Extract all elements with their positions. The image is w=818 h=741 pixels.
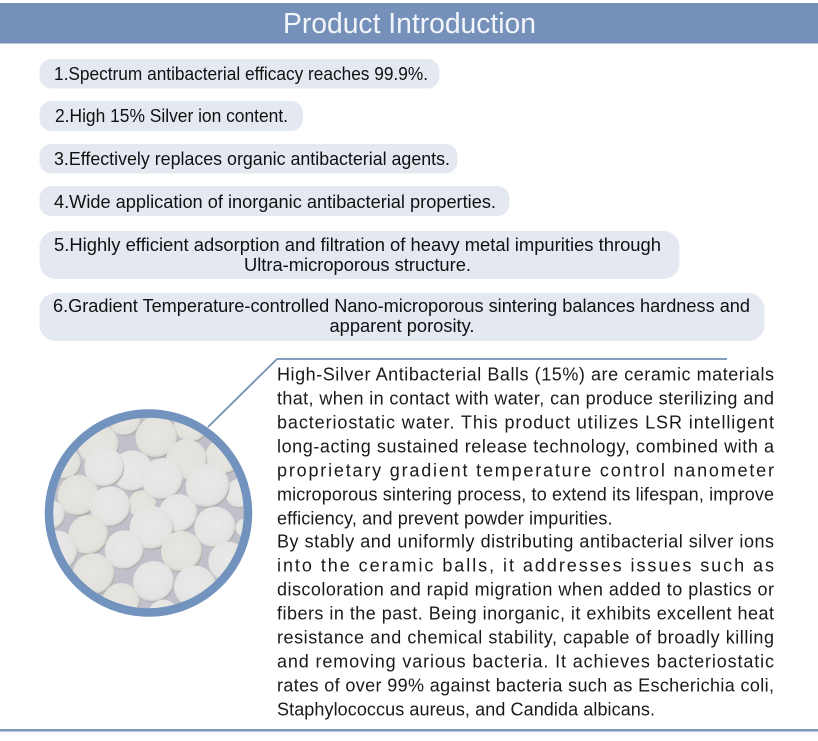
paragraph 1: that, when in contact with water, can produce sterilizing and bbox=[277, 388, 774, 408]
pill 5: Ultra-microporous structure. bbox=[244, 254, 471, 275]
callout connector line bbox=[208, 359, 727, 427]
pill 5 bbox=[40, 231, 680, 279]
circular photo of ceramic balls bbox=[44, 409, 252, 617]
paragraph 2: into the ceramic balls, it addresses issues such as bbox=[277, 555, 774, 575]
pill 2: 2.High 15% Silver ion content. bbox=[55, 105, 288, 126]
pill 6 bbox=[40, 293, 764, 341]
pill 5: 5.Highly efficient adsorption and filtration of heavy metal impurities through bbox=[54, 234, 661, 255]
description text bbox=[277, 364, 775, 719]
paragraph 2: resistance and chemical stability, capable of broadly killing bbox=[277, 627, 774, 647]
paragraph 1: High-Silver Antibacterial Balls (15%) are ceramic materials bbox=[277, 364, 774, 384]
paragraph 2: and removing various bacteria. It achieves bacteriostatic bbox=[277, 651, 774, 671]
paragraph 1: bacteriostatic water. This product utilizes LSR intelligent bbox=[277, 412, 774, 432]
paragraph 2 bbox=[277, 531, 774, 719]
bottom rule bbox=[0, 729, 818, 732]
paragraph 2: Staphylococcus aureus, and Candida albicans. bbox=[277, 699, 655, 719]
paragraph 1: proprietary gradient temperature control nanometer bbox=[277, 460, 774, 480]
paragraph 1: microporous sintering process, to extend its lifespan, improve bbox=[277, 484, 774, 504]
pill 2 bbox=[40, 101, 303, 131]
pill 6: 6.Gradient Temperature-controlled Nano-microporous sintering balances hardness and bbox=[53, 295, 750, 316]
pill 3 bbox=[40, 144, 458, 174]
pill 3: 3.Effectively replaces organic antibacterial agents. bbox=[54, 148, 450, 169]
paragraph 1: efficiency, and prevent powder impurities. bbox=[277, 508, 612, 528]
pill 1 bbox=[40, 59, 440, 88]
title: Product Introduction bbox=[283, 8, 536, 40]
ring bbox=[49, 414, 248, 612]
pill 6: apparent porosity. bbox=[330, 315, 474, 336]
paragraph 2: rates of over 99% against bacteria such as Escherichia coli, bbox=[277, 675, 774, 695]
header band bbox=[0, 3, 818, 44]
paragraph 1: long-acting sustained release technology, combined with a bbox=[277, 436, 775, 456]
paragraph 1 bbox=[277, 364, 775, 528]
paragraph 2: By stably and uniformly distributing antibacterial silver ions bbox=[277, 531, 774, 551]
paragraph 2: fibers in the past. Being inorganic, it exhibits excellent heat bbox=[277, 603, 774, 623]
feature list bbox=[40, 59, 764, 341]
paragraph 2: discoloration and rapid migration when added to plastics or bbox=[277, 579, 774, 599]
pill 4 bbox=[40, 186, 510, 216]
pill 1: 1.Spectrum antibacterial efficacy reaches 99.9%. bbox=[54, 63, 428, 84]
pill 4: 4.Wide application of inorganic antibacterial properties. bbox=[54, 191, 496, 212]
